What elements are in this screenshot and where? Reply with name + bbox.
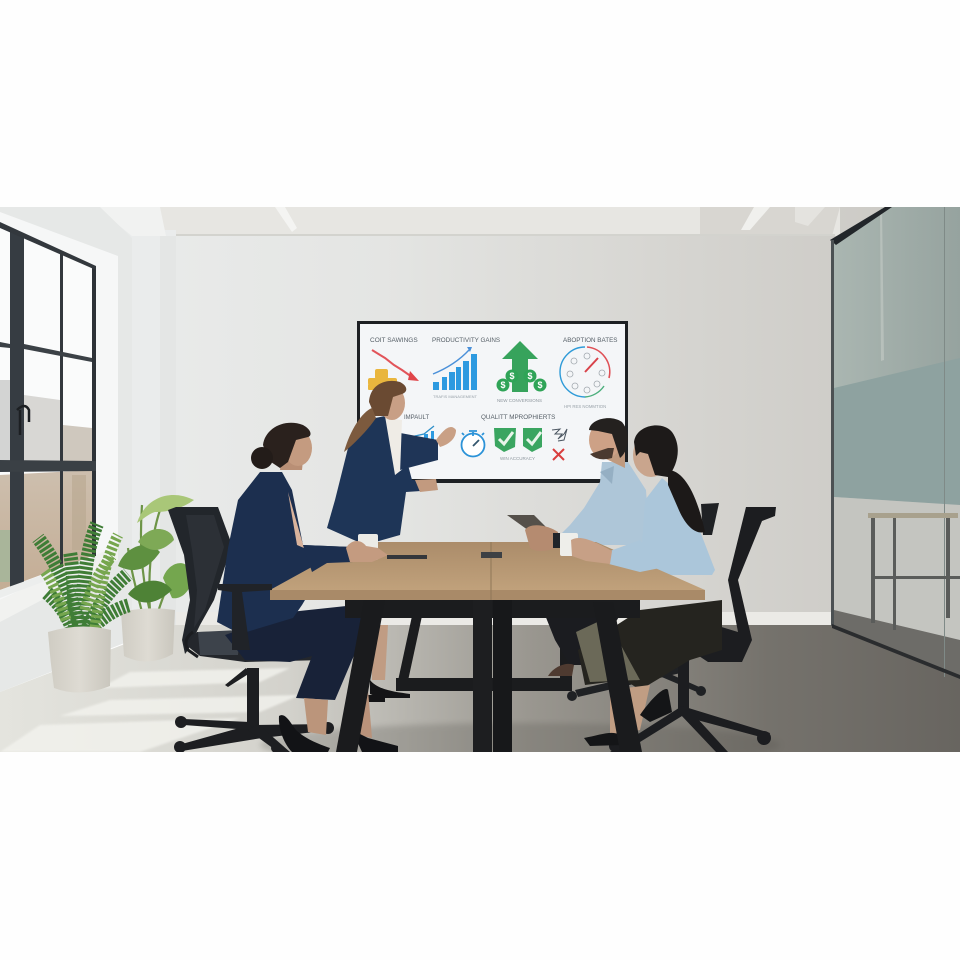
arm to hand bbox=[395, 432, 438, 470]
right woman's arm, mug and hand bbox=[560, 533, 660, 572]
neck and head bbox=[604, 445, 625, 468]
screen frame bbox=[357, 321, 628, 483]
photo scene: meeting room illustration bbox=[0, 207, 960, 752]
ponytail bbox=[344, 408, 376, 452]
beard bbox=[590, 448, 614, 459]
tabletop bbox=[270, 542, 705, 590]
legs: standing woman bbox=[355, 625, 410, 702]
caption: HPI RES NOMMTION bbox=[564, 404, 606, 409]
left A leg bbox=[336, 600, 385, 752]
pot: back plant bbox=[121, 608, 175, 662]
center legs bbox=[473, 600, 492, 752]
conference table bbox=[270, 542, 705, 752]
left woman's sleeve, mug and hands on table bbox=[303, 534, 388, 572]
chair: left bbox=[168, 507, 334, 753]
left wall bbox=[0, 207, 132, 692]
icon: coins bbox=[368, 369, 397, 390]
person: standing woman bbox=[327, 381, 456, 545]
ankle bbox=[304, 698, 328, 735]
gauge: adoption bbox=[560, 347, 610, 397]
head bbox=[379, 386, 405, 420]
window recess bbox=[0, 212, 118, 600]
icon: green arrow with dollars: $ bbox=[537, 380, 543, 390]
icon: scribble bbox=[552, 429, 567, 441]
icon: red cross bbox=[553, 449, 564, 460]
notebook on table bbox=[387, 555, 427, 559]
plant: fern bbox=[38, 524, 130, 628]
baseboard bbox=[405, 612, 831, 625]
column bbox=[130, 207, 176, 236]
jacket bbox=[217, 472, 353, 634]
icon: stopwatch bbox=[462, 431, 484, 456]
glass partition bbox=[830, 207, 960, 679]
screen heading: cost savings: COIT SAWINGS bbox=[370, 337, 418, 344]
head bbox=[280, 450, 304, 470]
floor shadow under table bbox=[260, 723, 780, 767]
blouse bbox=[384, 418, 402, 474]
wall screen bbox=[357, 321, 628, 483]
collar bbox=[600, 466, 614, 484]
desk seen through glass bbox=[868, 513, 960, 630]
sunlight on floor bbox=[0, 668, 300, 752]
seat bbox=[186, 630, 325, 662]
left chair armrest bbox=[218, 584, 272, 650]
ceiling soffit bbox=[130, 207, 840, 236]
shoe near bbox=[279, 715, 330, 752]
legs bbox=[545, 615, 620, 665]
room photograph bbox=[0, 207, 960, 767]
blouse bbox=[640, 478, 715, 575]
chair: right far bbox=[567, 503, 719, 701]
person: woman seated left bbox=[217, 423, 398, 752]
base bbox=[174, 668, 334, 753]
trend line bbox=[433, 350, 469, 374]
back wall bbox=[122, 207, 884, 612]
icon: green arrow with dollars: $ bbox=[500, 380, 506, 390]
under-table beam bbox=[345, 600, 640, 618]
person: man seated right bbox=[545, 418, 650, 676]
plant: back plant with large leaves bbox=[118, 495, 194, 612]
icon: green arrow with dollars: $ bbox=[527, 371, 533, 381]
screen heading: productivity: PRODUCTIVITY GAINS bbox=[432, 337, 500, 344]
far ankle bbox=[348, 690, 372, 738]
icon: green check shield bbox=[494, 428, 516, 452]
hair bbox=[589, 418, 628, 458]
man's hand and watch bbox=[525, 525, 560, 551]
pot: fern bbox=[48, 626, 111, 693]
icon: green check shield bbox=[523, 428, 542, 452]
hand lower bbox=[415, 479, 438, 492]
shirt bbox=[560, 462, 650, 545]
trousers bbox=[578, 600, 722, 690]
window panes bbox=[0, 222, 95, 590]
person: woman seated right bbox=[576, 425, 722, 746]
ponytail bbox=[668, 470, 705, 533]
table back legs bbox=[396, 616, 572, 691]
shoe bbox=[548, 664, 574, 676]
chair back bbox=[168, 507, 232, 654]
table power port bbox=[481, 552, 502, 558]
table edge bbox=[270, 590, 705, 600]
screen heading: adoption: ABOPTION BATES bbox=[563, 337, 617, 344]
shoe far bbox=[352, 730, 398, 752]
head bbox=[633, 433, 669, 477]
caption: TRAFIS MANAGEMENT bbox=[433, 394, 478, 399]
right A leg bbox=[593, 602, 642, 752]
floor bbox=[0, 625, 960, 752]
jacket bbox=[327, 416, 436, 545]
icon: green arrow with dollars bbox=[496, 341, 546, 392]
trousers bbox=[225, 604, 367, 700]
caption: WIN ACCURACY bbox=[500, 456, 535, 461]
tablet bbox=[507, 515, 549, 533]
icon: falling cost line bbox=[372, 350, 419, 381]
screen heading: impact: IMPAULT bbox=[404, 415, 429, 421]
blouse bbox=[288, 492, 304, 548]
raised hand bbox=[436, 427, 456, 447]
caption: NEW CONVERSIONS bbox=[497, 398, 542, 403]
screen heading: quality: QUALITT MPROPHIERTS bbox=[481, 414, 555, 421]
hair bun bbox=[251, 447, 273, 469]
chart: impact bbox=[414, 426, 434, 440]
window bbox=[0, 222, 96, 598]
icon: green arrow with dollars: $ bbox=[509, 371, 515, 381]
shoes bbox=[584, 733, 622, 746]
bar chart: productivity bbox=[433, 354, 477, 390]
lower leg bbox=[610, 685, 650, 735]
chair: right near bbox=[609, 507, 776, 752]
